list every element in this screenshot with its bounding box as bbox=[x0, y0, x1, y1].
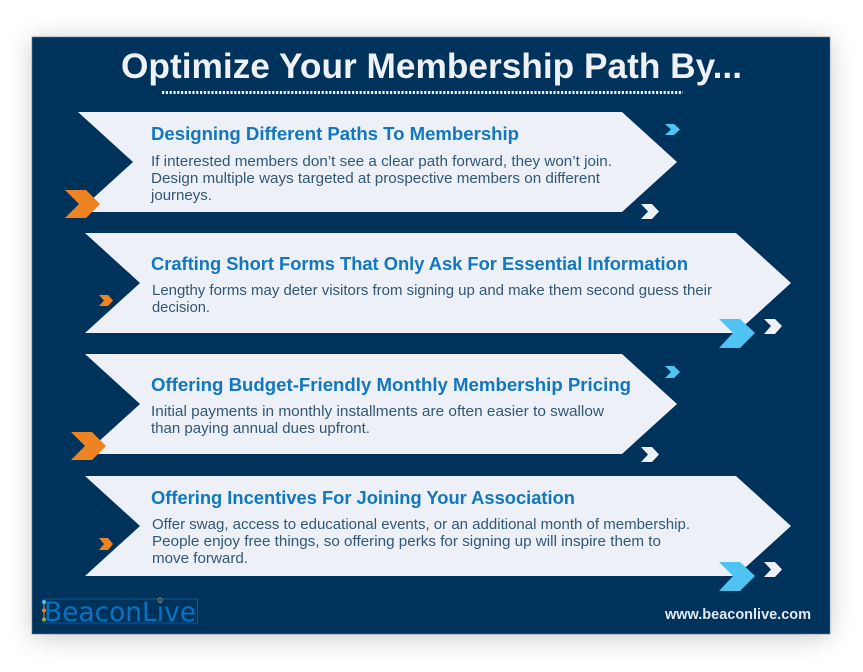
panel: step 2 bbox=[85, 233, 791, 333]
step 1 body: Design multiple ways targeted at prospective members on different bbox=[151, 171, 600, 187]
step 1 body: journeys. bbox=[150, 188, 212, 204]
title: Optimize Your Membership Path By... bbox=[121, 47, 742, 86]
step 3 body bbox=[151, 404, 605, 437]
step 3 body: than paying annual dues upfront. bbox=[151, 421, 370, 437]
logo: BeaconLive: BeaconLive bbox=[44, 597, 196, 628]
icon: small blue chevron step 1 bbox=[665, 124, 680, 135]
step 3 body: Initial payments in monthly installments are often easier to swallow bbox=[151, 404, 605, 420]
step 4 body bbox=[152, 517, 690, 567]
step 1 heading: Designing Different Paths To Membership bbox=[151, 123, 519, 144]
panel: step 1 bbox=[78, 112, 677, 212]
step 4 body: People enjoy free things, so offering perks for signing up will inspire them to bbox=[152, 534, 661, 550]
icon: white chevron step 4 bbox=[764, 562, 782, 577]
step 4 heading: Offering Incentives For Joining Your Association bbox=[151, 487, 575, 508]
icon: small orange chevron step 2 bbox=[99, 295, 113, 306]
icon: white chevron step 2 bbox=[764, 319, 782, 334]
icon: white chevron step 3 bbox=[641, 447, 659, 462]
step 4 body: move forward. bbox=[152, 551, 248, 567]
step 2 heading: Crafting Short Forms That Only Ask For Essential Information bbox=[151, 253, 688, 274]
step 3 heading: Offering Budget-Friendly Monthly Membership Pricing bbox=[151, 374, 631, 395]
icon: large orange chevron step 3 bbox=[71, 432, 106, 460]
icon: small blue chevron step 3 bbox=[665, 366, 680, 378]
step 1 body bbox=[150, 154, 612, 204]
step 4 body: Offer swag, access to educational events, or an additional month of membership. bbox=[152, 517, 690, 533]
icon: large blue chevron step 4 bbox=[719, 562, 755, 591]
icon: small orange chevron step 4 bbox=[99, 538, 113, 550]
panel: step 4 bbox=[85, 476, 791, 576]
step 1 body: If interested members don’t see a clear path forward, they won’t join. bbox=[151, 154, 612, 170]
icon: large orange chevron step 1 bbox=[65, 190, 100, 218]
step 2 body: decision. bbox=[152, 300, 210, 316]
website url: www.beaconlive.com bbox=[664, 607, 811, 623]
step 2 body: Lengthy forms may deter visitors from signing up and make them second guess their bbox=[152, 283, 712, 299]
icon: large blue chevron step 2 bbox=[719, 319, 755, 348]
title dotted underline bbox=[162, 91, 683, 94]
step 2 body bbox=[152, 283, 712, 316]
panel: step 3 bbox=[85, 354, 677, 454]
icon: white chevron step 1 bbox=[641, 204, 659, 219]
